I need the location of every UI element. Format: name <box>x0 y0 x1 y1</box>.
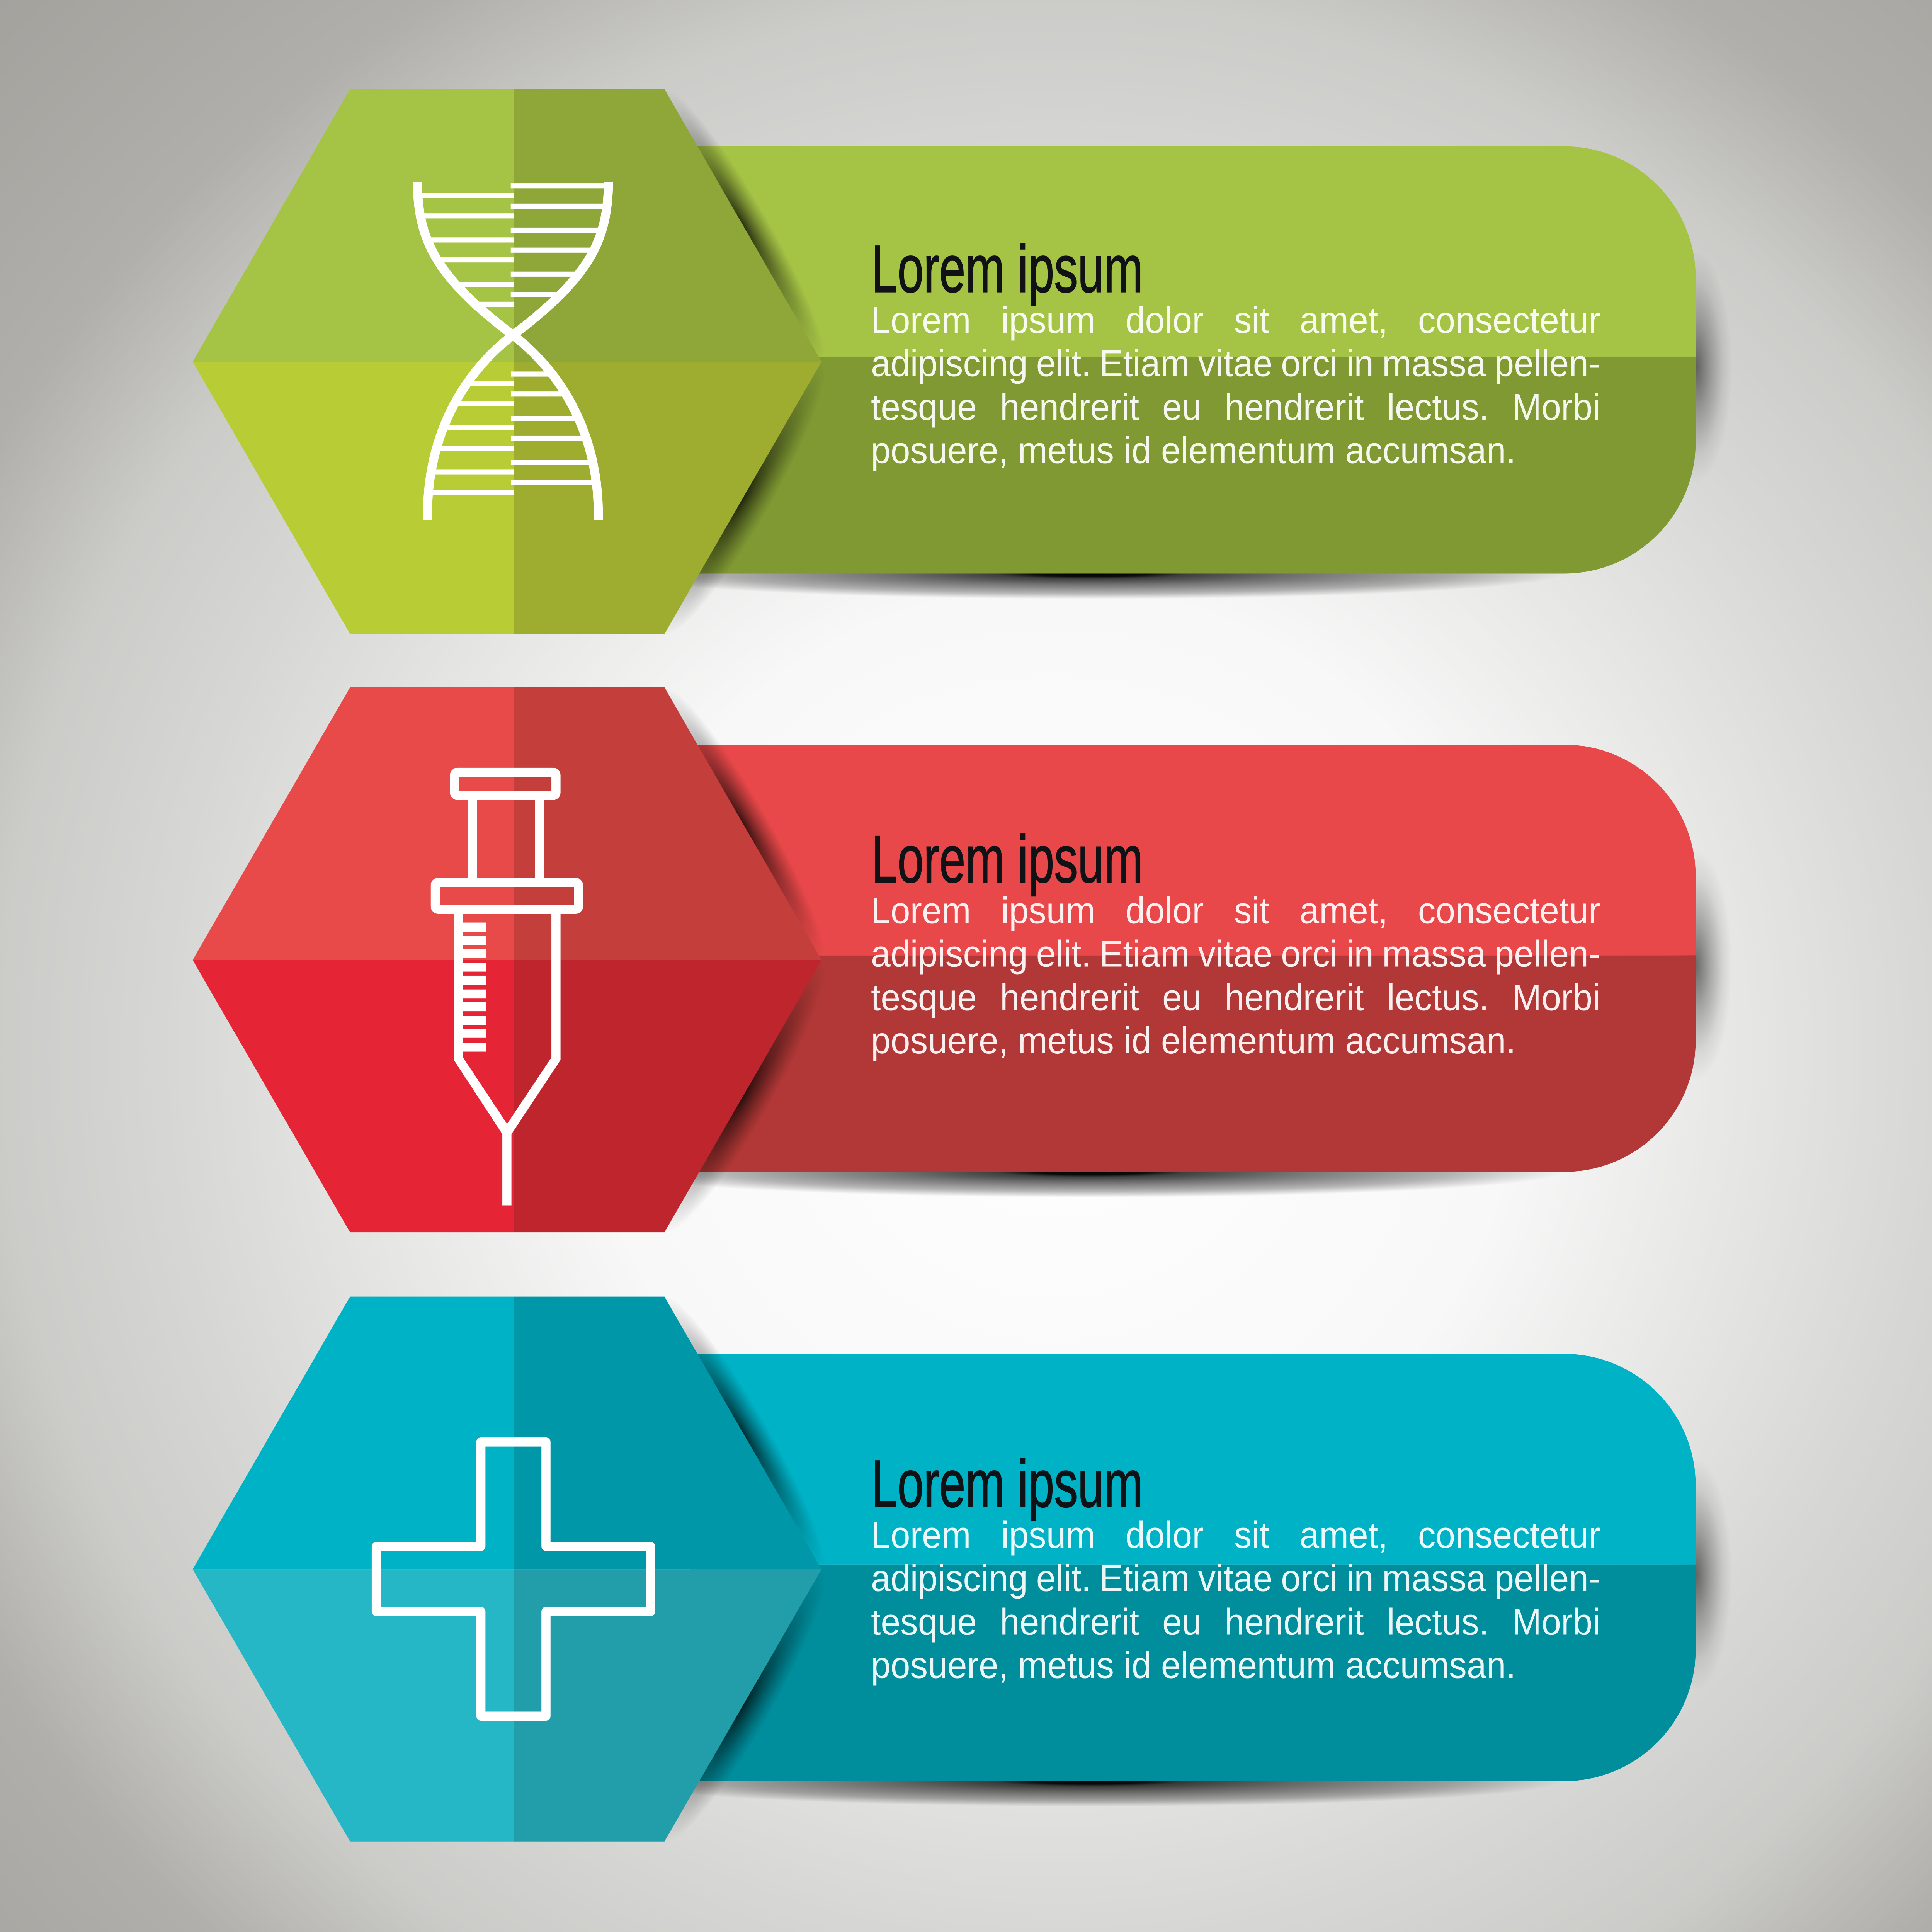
red body text <box>871 889 1600 1061</box>
green body text: Lorem ipsum dolor sit amet, consectetur <box>871 299 1600 341</box>
red body text: tesque hendrerit eu hendrerit lectus. Morbi <box>871 976 1600 1018</box>
blue hexagon shadow <box>641 1285 845 1855</box>
panel: blue cross <box>193 1285 1732 1855</box>
green banner shadow <box>618 251 1732 599</box>
blue body text: Lorem ipsum dolor sit amet, consectetur <box>871 1514 1600 1556</box>
green body text: tesque hendrerit eu hendrerit lectus. Morbi <box>871 386 1600 428</box>
green banner <box>690 146 1696 573</box>
icon: medical cross <box>376 1442 651 1716</box>
icon: DNA helix <box>417 182 609 520</box>
blue heading: Lorem ipsum <box>871 1446 1143 1521</box>
panel: red syringe <box>193 676 1732 1246</box>
green heading: Lorem ipsum <box>871 231 1143 306</box>
blue body text: adipiscing elit. Etiam vitae orci in massa pellen- <box>871 1557 1600 1599</box>
green hexagon shadow <box>641 77 845 648</box>
blue body text <box>871 1514 1600 1686</box>
red banner shadow <box>618 849 1732 1197</box>
green body text: adipiscing elit. Etiam vitae orci in massa pellen- <box>871 342 1600 384</box>
red body text: posuere, metus id elementum accumsan. <box>871 1020 1516 1061</box>
blue hexagon <box>193 1297 821 1842</box>
green hexagon <box>193 89 821 634</box>
blue body text: tesque hendrerit eu hendrerit lectus. Morbi <box>871 1601 1600 1643</box>
panel: green DNA <box>193 77 1732 648</box>
red hexagon <box>193 687 821 1232</box>
red body text: adipiscing elit. Etiam vitae orci in massa pellen- <box>871 933 1600 975</box>
red heading: Lorem ipsum <box>871 822 1143 896</box>
red hexagon shadow <box>641 676 845 1246</box>
red banner <box>690 745 1696 1172</box>
icon: syringe <box>435 772 578 1205</box>
green body text <box>871 299 1600 471</box>
blue banner shadow <box>618 1458 1732 1806</box>
green body text: posuere, metus id elementum accumsan. <box>871 429 1516 471</box>
blue body text: posuere, metus id elementum accumsan. <box>871 1644 1516 1686</box>
blue banner <box>690 1354 1696 1781</box>
red body text: Lorem ipsum dolor sit amet, consectetur <box>871 889 1600 931</box>
